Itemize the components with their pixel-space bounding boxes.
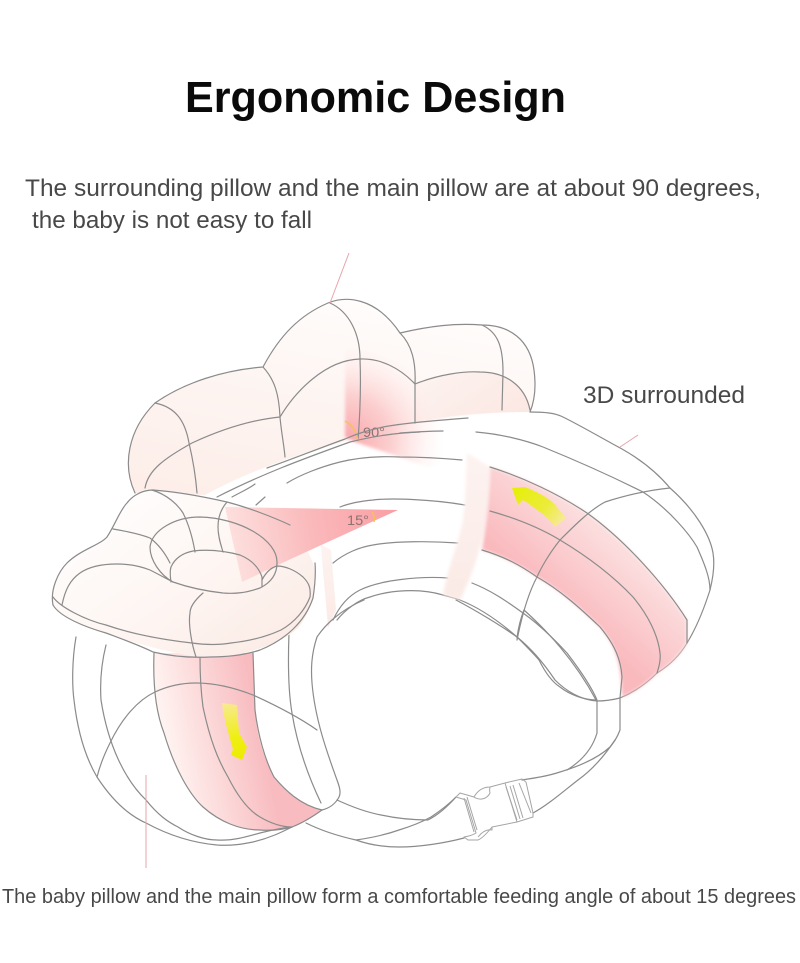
pink pointer line, right [620, 435, 638, 447]
seams on right band [482, 467, 687, 698]
surrounding back pillow [128, 299, 535, 495]
caption, bottom: The baby pillow and the main pillow form a comfortable feeding angle of about 15 degrees [2, 886, 796, 908]
right pink band [482, 467, 687, 697]
pink pointer line, top [330, 253, 349, 303]
baby pillow: 15° [347, 512, 369, 528]
15 degree mark [372, 512, 375, 522]
icon: yellow arrow, right [512, 487, 566, 527]
pink pointer line, bottom [145, 775, 147, 868]
inner hole contour [312, 600, 364, 810]
pale strip across main pillow [443, 453, 490, 600]
main pillow inner arcs [217, 418, 468, 620]
pillow illustration [52, 253, 714, 868]
main pillow upper contour [460, 412, 714, 701]
description text: the baby is not easy to fall [32, 207, 312, 234]
description text: The surrounding pillow and the main pillow are at about 90 degrees, [25, 175, 761, 202]
pale strip near inner hole [321, 545, 336, 628]
icon: yellow arrow, left [222, 703, 247, 760]
bottom U contour [306, 797, 464, 847]
surrounding back pillow: 90° [363, 424, 385, 440]
15 degree angle wedge [225, 507, 398, 582]
title: Ergonomic Design [185, 73, 566, 122]
lower left body contours [73, 633, 322, 845]
90 degree angle wedge [345, 335, 470, 468]
baby pillow [52, 490, 398, 657]
description text [25, 175, 761, 234]
90 degree mark [345, 421, 358, 442]
left pink band [154, 653, 322, 830]
lower right contour [456, 600, 620, 813]
label: 3D surrounded: 3D surrounded [583, 382, 745, 409]
buckle [456, 779, 533, 840]
